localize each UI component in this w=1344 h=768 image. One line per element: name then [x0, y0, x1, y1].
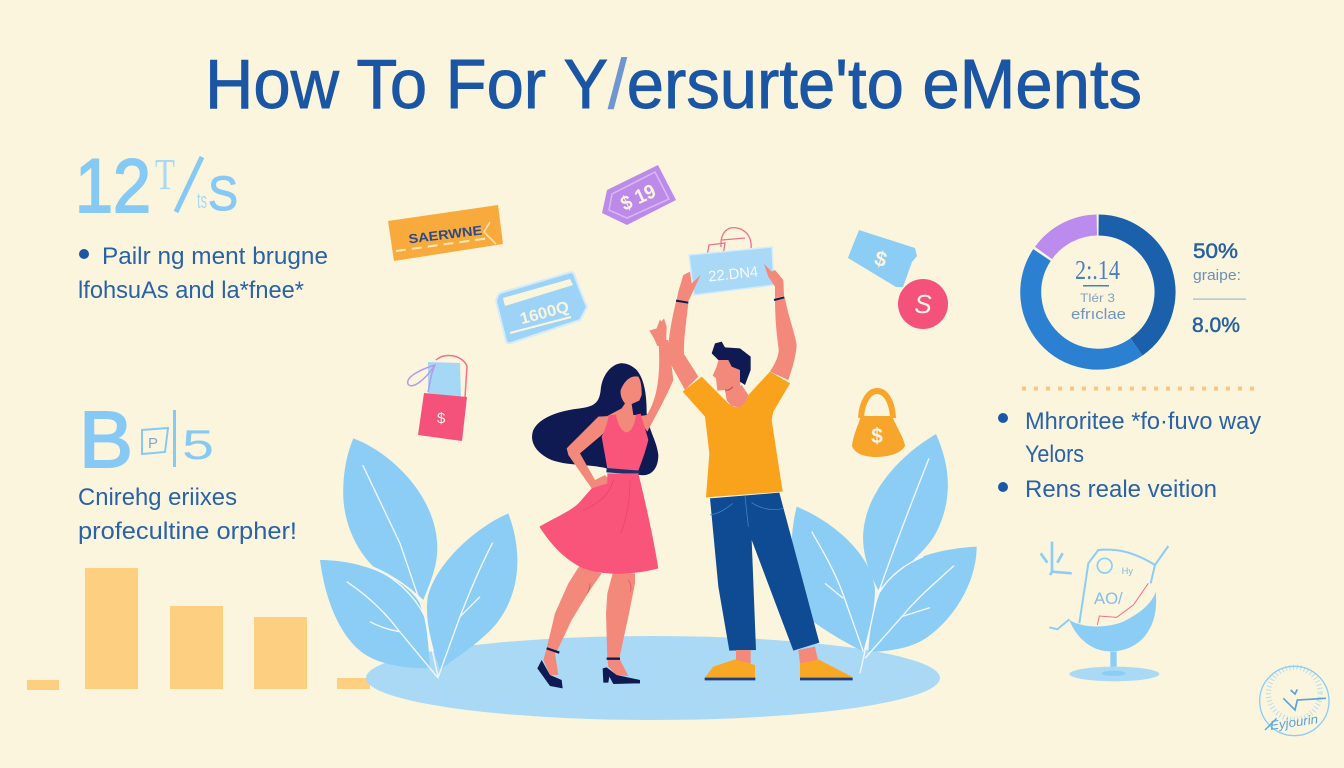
shopping bag: pink: $: [437, 410, 446, 427]
icon: bowl with document: AO/: [1094, 589, 1123, 608]
donut chart: [1031, 225, 1165, 359]
stat: 12 T/s: S: [208, 168, 238, 221]
coupon: orange sale ticket: [388, 205, 503, 261]
illustration: woman: [532, 318, 673, 688]
held ticket with bag sketch: [689, 228, 774, 295]
icon: bowl with document: [1041, 542, 1168, 681]
stat: 12 T/s: T: [155, 150, 175, 199]
coupon: orange sale ticket: SAERWNE: [408, 222, 483, 246]
coin: red dollar: S: [914, 289, 932, 319]
text block: lower left: [78, 484, 297, 545]
stat: B 5: P: [148, 435, 158, 452]
stat: 12 T/s: ts: [197, 188, 207, 213]
left plant: [320, 438, 517, 678]
right plant: [791, 434, 977, 673]
stat: 12 T/s: 12: [75, 144, 151, 229]
held ticket with bag sketch: 22.DN4: [708, 263, 759, 285]
text block: right bullets: Yelors: [1025, 441, 1084, 468]
donut legend: 50%: [1193, 240, 1238, 263]
donut legend: 8.0%: [1192, 314, 1240, 337]
donut centre label: efrıclae: [1071, 306, 1126, 323]
text block: right bullets: Mhroritee *fo·fuvo way: [1025, 408, 1261, 435]
donut centre label: [1071, 255, 1126, 323]
shopping bag: orange: [852, 391, 905, 457]
shopping bag: orange: $: [871, 425, 883, 448]
illustration: man: [668, 264, 853, 679]
stamp seal: [1260, 666, 1329, 736]
text block: top left bullet: [78, 243, 328, 304]
coupon: blue ticket right: [848, 230, 917, 287]
text block: top left bullet: lfohsuAs and la*fnee*: [78, 277, 304, 304]
text block: top left bullet: Pailr ng ment brugne: [102, 243, 328, 270]
price tag: purple $19: $ 19: [617, 180, 659, 215]
icon: bowl with document: Hy: [1122, 566, 1133, 576]
shopping bag: pink: [408, 355, 467, 441]
stat: B 5: B: [79, 395, 133, 484]
stat: B 5: [79, 395, 214, 484]
bar chart: [27, 568, 370, 690]
title: How To For Y/ersurte'to eMents: [205, 45, 1142, 123]
text block: lower left: Cnirehg eriixes: [78, 484, 237, 511]
donut centre label: 2:.14: [1075, 255, 1120, 285]
text block: right bullets: [998, 408, 1261, 503]
donut legend: [1192, 240, 1246, 337]
coupon: blue 1600 ticket: 1600Q: [518, 299, 571, 328]
donut legend: graipe:: [1193, 267, 1241, 284]
price tag: purple $19: [602, 165, 676, 225]
stat: B 5: 5: [182, 421, 214, 468]
donut centre label: Tlér 3: [1080, 291, 1115, 305]
text block: lower left: profecultine orpher!: [78, 518, 297, 545]
ground ellipse: [366, 636, 940, 720]
stat: 12 T/s: [75, 144, 238, 229]
coupon: blue 1600 ticket: [496, 272, 587, 343]
coin: red dollar: [898, 279, 948, 329]
text block: right bullets: Rens reale veition: [1025, 476, 1217, 503]
coupon: blue ticket right: $: [872, 247, 890, 272]
stamp seal: Eyjourin: [1269, 712, 1319, 733]
